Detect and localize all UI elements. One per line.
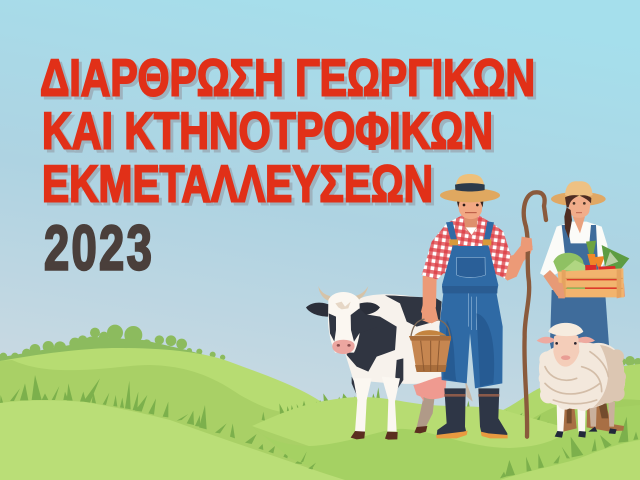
middle meadow: light field: [252, 397, 570, 450]
right back hill: [480, 364, 640, 480]
hat: [440, 188, 500, 202]
boots: [437, 388, 467, 436]
woman's bib and straps: [562, 225, 598, 270]
gripping hand: [521, 237, 533, 253]
woman's hat: [551, 192, 606, 206]
landscape: hills and grass: [0, 325, 640, 480]
shepherd's staff: [524, 192, 546, 437]
cow front legs: [353, 378, 372, 432]
ears: [306, 302, 380, 317]
front right hill: [500, 440, 640, 480]
woman's face and braid: [567, 197, 591, 218]
foreground grass: [300, 417, 638, 478]
hand on bucket: [421, 305, 438, 323]
head: [328, 292, 361, 353]
title: ΕΚΜΕΤΑΛΛΕΥΣΕΩΝ: [42, 154, 433, 212]
neck and face: [463, 212, 478, 235]
cow body: [340, 294, 447, 384]
farmer man: [409, 174, 546, 438]
cow tail: [465, 380, 473, 402]
illustration: farmers and animals (traced in 3x zoom coordinates): [306, 174, 629, 440]
sheep ears: [537, 337, 595, 343]
horns: [318, 286, 368, 302]
lower shaded field: [252, 405, 640, 480]
cow: [306, 286, 473, 440]
back left hill: [0, 348, 345, 480]
hand on crate: [555, 282, 565, 298]
sheep wool body: [539, 342, 625, 411]
shirt: [422, 215, 511, 279]
cow black patches: [347, 295, 442, 372]
woman's neck: [573, 217, 585, 233]
man's left arm and hand: [503, 242, 533, 281]
sheep legs: [557, 403, 586, 432]
woman's shirt: [540, 222, 608, 278]
sheep wool shaded side: [593, 345, 626, 407]
bushes on the horizon: [0, 325, 640, 366]
muzzle: [332, 340, 355, 354]
farmer woman: [540, 181, 629, 432]
cow rear far leg: [417, 390, 435, 427]
vegetables: [553, 241, 629, 273]
grass blades behind the animals: [302, 387, 562, 431]
man's right arm: [422, 276, 437, 323]
bucket: [409, 319, 451, 372]
title: ΚΑΙ ΚΤΗΝΟΤΡΟΦΙΚΩΝ: [42, 102, 493, 160]
shaded band: [0, 360, 340, 480]
grass blades behind front hill: [0, 375, 318, 469]
woman's arms: [543, 270, 625, 298]
front left hill: [0, 400, 345, 480]
woman's overalls: [550, 290, 609, 403]
title: [40, 48, 535, 212]
overall straps: [446, 221, 494, 247]
udder: [413, 376, 447, 402]
sheep face: [553, 333, 579, 367]
sheep: [537, 323, 626, 438]
year: 2023: [44, 212, 154, 283]
overalls: [439, 246, 503, 388]
woman's boots: [563, 402, 624, 432]
crate: [558, 268, 624, 297]
